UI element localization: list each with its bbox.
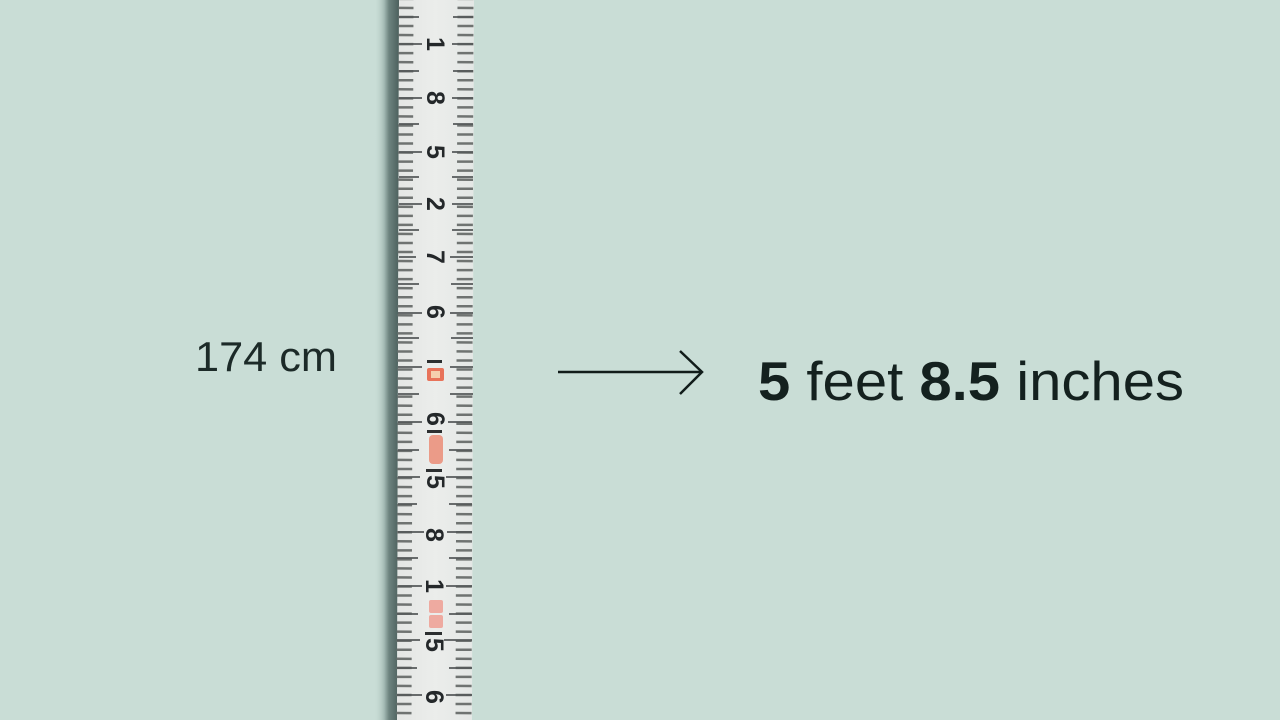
ruler numbers: 6 — [421, 305, 449, 319]
measuring tape — [374, 0, 474, 720]
ruler numbers: 7 — [421, 250, 449, 264]
height in feet and inches: 5 feet 8.5 inches — [758, 350, 1184, 412]
ruler numbers: 5 — [421, 475, 449, 489]
ruler numbers: 2 — [421, 197, 449, 211]
ruler numbers: 6 — [421, 412, 449, 426]
ruler numbers: 8 — [421, 91, 449, 105]
fine tick marks — [404, 0, 466, 720]
height in centimetres: 174 cm — [195, 333, 337, 380]
long tick marks — [397, 17, 473, 695]
ruler numbers: 6 — [420, 690, 448, 704]
ruler numbers: 8 — [420, 528, 448, 542]
arrow — [558, 351, 702, 394]
ruler numbers: 1 — [421, 37, 449, 51]
ruler numbers — [420, 37, 449, 704]
ruler numbers: 5 — [420, 638, 448, 652]
ruler numbers: 5 — [421, 145, 449, 159]
red highlight markers — [425, 360, 444, 635]
ruler numbers: 1 — [420, 579, 448, 593]
